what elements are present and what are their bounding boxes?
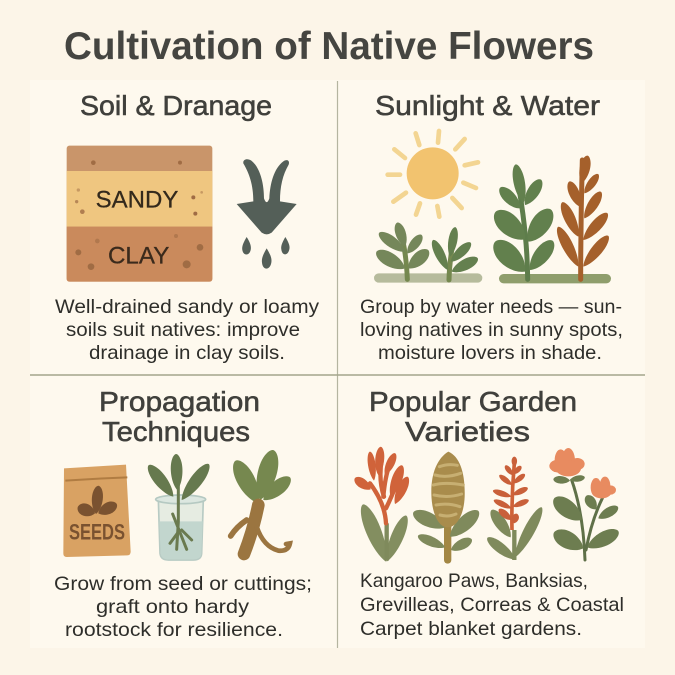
heading: soil: Soil & Dranage: [80, 90, 272, 121]
panel background grid: [30, 80, 645, 648]
title: Cultivation of Native Flowers: [64, 25, 594, 68]
heading: varieties: Popular Garden: [369, 386, 577, 417]
icon: banksia: [410, 452, 483, 560]
heading: propagation: Techniques: [102, 416, 250, 447]
icon: soil layers: SANDY: [96, 187, 178, 214]
icon: correa flowers: [549, 448, 622, 560]
text: sunlight description: [360, 296, 623, 364]
text: varieties description: Kangaroo Paws, Banksias,: [360, 570, 588, 592]
icon: sun: [388, 131, 478, 217]
text: soil description: Well-drained sandy or loamy: [55, 296, 319, 318]
icon: cutting in water glass: [144, 454, 214, 560]
heading: varieties: Varieties: [405, 416, 530, 447]
icon: small plants: [373, 221, 482, 283]
icon: soil layers: [67, 146, 212, 282]
text: varieties description: [360, 570, 624, 640]
text: sunlight description: Group by water needs — sun-: [360, 296, 622, 318]
text: propagation description: graft onto hardy: [96, 596, 249, 618]
icon: tall plants: [488, 155, 613, 283]
icon: grevillea: [484, 457, 546, 563]
panel: soil and drainage: [55, 90, 319, 364]
text: sunlight description: loving natives in sunny spots,: [360, 319, 623, 341]
text: soil description: [55, 296, 319, 364]
text: propagation description: rootstock for resilience.: [65, 619, 283, 641]
heading: sunlight: Sunlight & Water: [375, 90, 600, 121]
text: varieties description: Grevilleas, Correas & Coastal: [360, 594, 624, 616]
icon: drainage arrow and drops: [237, 159, 297, 269]
icon: seed bag: [63, 465, 131, 557]
heading: propagation: [99, 386, 260, 447]
icon: soil layers: CLAY: [108, 243, 169, 270]
panel: propagation: [54, 386, 312, 641]
text: propagation description: Grow from seed or cuttings;: [54, 573, 312, 595]
text: propagation description: [54, 573, 312, 641]
icon: seed bag: SEEDS: [69, 519, 125, 544]
panel: popular garden varieties: [352, 386, 624, 640]
heading: varieties: [369, 386, 577, 447]
text: varieties description: Carpet blanket gardens.: [360, 618, 582, 640]
text: soil description: drainage in clay soils.: [89, 342, 285, 364]
icon: kangaroo paw: [352, 446, 412, 564]
text: soil description: soils suit natives: improve: [66, 319, 300, 341]
icon: grafted rootstock: [228, 448, 295, 554]
panel: sunlight and water: [360, 90, 623, 364]
text: sunlight description: moisture lovers in shade.: [378, 342, 602, 364]
heading: propagation: Propagation: [99, 386, 260, 417]
